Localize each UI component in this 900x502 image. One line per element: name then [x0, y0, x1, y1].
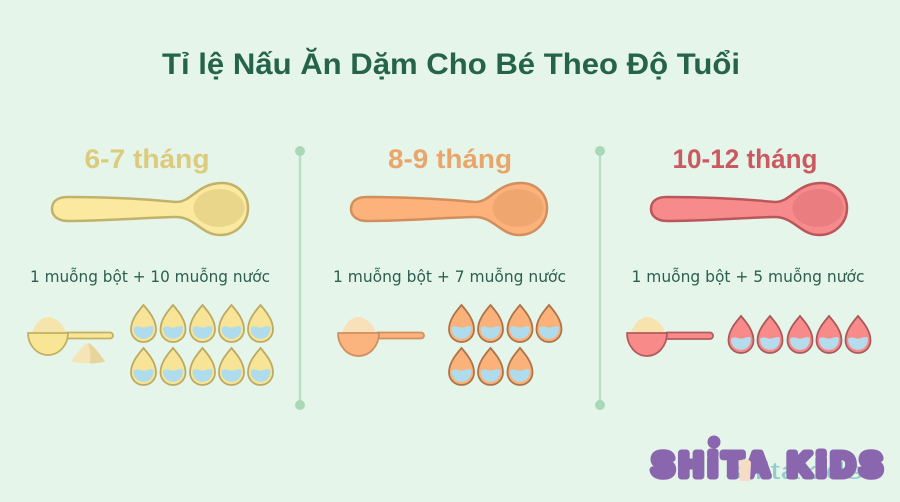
icon: orange scoop with powder [338, 317, 424, 356]
ratio text: 6-7 months: 1 muỗng bột + 10 muỗng nước [30, 267, 270, 286]
panel: 10-12 months [627, 144, 870, 356]
heading: 8-9 months: 8-9 tháng [388, 144, 512, 174]
icon: logo dot [708, 436, 720, 448]
logo: Shita Kids: SHiTA KiDS [652, 446, 882, 483]
icon: yellow spoon [52, 183, 248, 235]
panel: 8-9 months [333, 144, 566, 385]
water drops: 7 [449, 305, 562, 385]
panel: 6-7 months [28, 144, 273, 385]
icon: yellow scoop with powder [28, 317, 113, 355]
ratio text: 8-9 months: 1 muỗng bột + 7 muỗng nước [333, 267, 566, 286]
icon: red spoon [651, 183, 847, 235]
divider: left [295, 146, 305, 410]
water drops: 10 [131, 305, 273, 385]
water drops: 5 [728, 316, 870, 353]
logo: faint watermark: shitakids [725, 458, 863, 485]
icon: red scoop with powder [627, 317, 713, 356]
heading: 10-12 months: 10-12 tháng [672, 144, 818, 174]
ratio text: 10-12 months: 1 muỗng bột + 5 muỗng nước [632, 267, 864, 286]
heading: 6-7 months: 6-7 tháng [84, 144, 210, 174]
icon: powder pile [71, 343, 105, 364]
icon: mascot [739, 459, 751, 481]
icon: orange spoon [351, 183, 547, 235]
divider: right [595, 146, 605, 410]
title: Tỉ lệ Nấu Ăn Dặm Cho Bé Theo Độ Tuổi [162, 47, 740, 81]
